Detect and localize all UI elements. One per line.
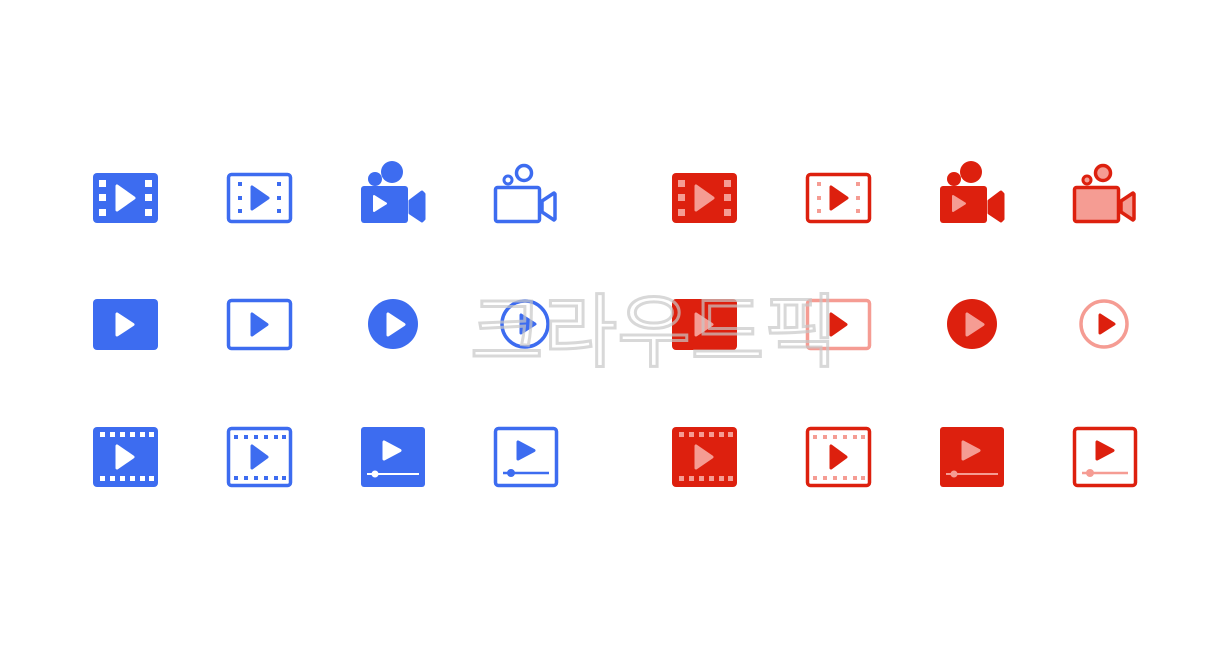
icon: filled film frame: [93, 427, 158, 487]
icon: outline play screen red: [808, 300, 870, 348]
icon: outline play circle: [502, 301, 548, 347]
icon: filled player with slider red: [940, 427, 1004, 487]
icon: outline video camera: [496, 166, 555, 222]
icon: outline player with slider: [496, 428, 556, 486]
icon: filled video camera: [361, 161, 424, 223]
icon: filled play circle red: [947, 299, 997, 349]
icon: outline film frame red: [808, 428, 870, 486]
icon: outline film strip red: [808, 174, 870, 222]
icon: outline play screen: [228, 300, 290, 348]
icon: filled video camera red: [940, 161, 1003, 223]
red icon set: [672, 161, 1136, 487]
icon: filled play screen: [93, 299, 158, 350]
icon: outline player with slider red: [1074, 428, 1136, 486]
icon: outline film frame: [228, 428, 290, 486]
icon: outline play circle red: [1081, 301, 1127, 347]
icon: outline video camera red: [1074, 166, 1134, 222]
icon: filled player with slider: [361, 427, 425, 487]
icon: outline film strip: [228, 174, 290, 222]
watermark text: 크라우드픽: [470, 288, 838, 377]
icon: filled play circle: [368, 299, 418, 349]
icon: filled film strip red: [672, 173, 737, 223]
icon: filled film strip: [93, 173, 158, 223]
blue icon set: [93, 161, 556, 487]
icon: filled play screen red: [672, 299, 737, 350]
icon: filled film frame red: [672, 427, 737, 487]
